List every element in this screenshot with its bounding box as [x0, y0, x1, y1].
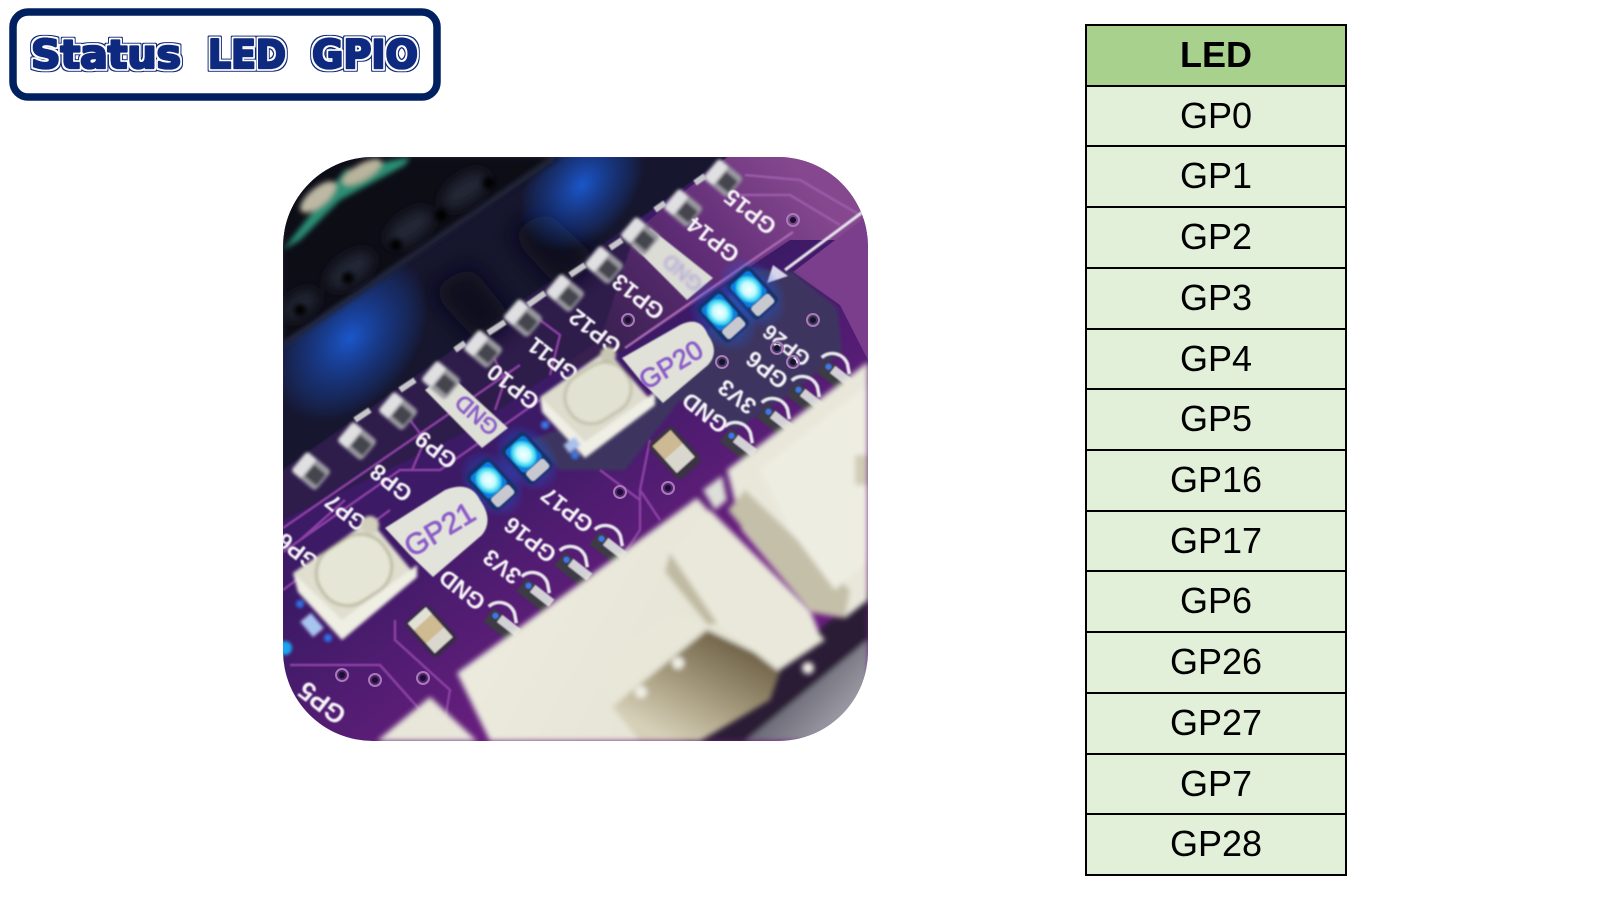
row GP16: GP16 [1170, 459, 1262, 500]
pin labels lower row: 3V3 [713, 374, 761, 420]
pin labels lower row: GP17 [536, 482, 598, 538]
row GP0: GP0 [1180, 95, 1252, 136]
pin labels upper row: GP11 [522, 332, 584, 388]
blue reflection top [522, 157, 642, 248]
capacitor right [648, 426, 701, 480]
table: LED GPIO list [1085, 24, 1347, 876]
pin labels upper row: GP9 [410, 426, 462, 474]
row GP1: GP1 [1180, 155, 1252, 196]
band shadow streaks [430, 210, 600, 345]
connector lower main [457, 498, 825, 741]
GND label left: GND [450, 390, 504, 440]
LED: GP17 [496, 426, 558, 490]
socket ridges [284, 169, 488, 322]
row GP5 [1087, 390, 1345, 451]
row GP16 [1087, 451, 1345, 512]
pin labels upper row: GP7 [320, 489, 372, 537]
silkscreen dashes between pads [355, 176, 705, 420]
silkscreen bar: GND left [425, 372, 508, 448]
row GP6 [1087, 572, 1345, 633]
GP21 text: GP21 [399, 496, 481, 564]
header socket band [283, 157, 727, 470]
pin labels upper row: GP6 [272, 528, 324, 576]
title text: LED [208, 33, 286, 78]
header pads row [290, 158, 744, 491]
GP20 text: GP20 [634, 334, 708, 396]
connector pins [479, 347, 861, 643]
PCB navy zone around LEDs [530, 268, 842, 470]
title text: Status [31, 33, 181, 78]
board edge and rim [680, 590, 868, 741]
pin labels upper row: GP10 [482, 359, 544, 415]
row GP17 [1087, 512, 1345, 572]
silkscreen bar: GND right [632, 228, 713, 300]
green board at top corner [283, 154, 410, 250]
pin labels lower row: GP6 [741, 346, 793, 394]
row GP17: GP17 [1170, 520, 1262, 561]
connector latch [670, 510, 822, 670]
title banner [9, 8, 441, 101]
row GP5: GP5 [1180, 398, 1252, 439]
pin labels upper row: GP15 [719, 184, 781, 240]
LED: GP26 [720, 260, 784, 326]
row GP3 [1087, 269, 1345, 330]
row GP28: GP28 [1170, 823, 1262, 864]
connector bottom left [377, 697, 477, 741]
row GP26: GP26 [1170, 641, 1262, 682]
pin labels upper row: GP5 [292, 675, 352, 731]
row GP4: GP4 [1180, 338, 1252, 379]
pin labels upper row: GP14 [682, 212, 744, 268]
connector upper right [703, 362, 868, 618]
row GP0 [1087, 87, 1345, 147]
blue reflection left [283, 267, 425, 418]
row GP6: GP6 [1180, 580, 1252, 621]
row GP27: GP27 [1170, 702, 1262, 743]
table header: LED [1180, 34, 1252, 75]
row GP2: GP2 [1180, 216, 1252, 257]
connector lip [600, 612, 707, 700]
row GP4 [1087, 330, 1345, 390]
PCB base [283, 157, 868, 741]
PCB traces [283, 175, 860, 720]
pin labels upper row: GP8 [365, 458, 417, 507]
row GP26 [1087, 633, 1345, 694]
title frame [13, 12, 437, 97]
white arrow pointing at LED [767, 208, 868, 283]
row GP3: GP3 [1180, 277, 1252, 318]
socket holes [294, 177, 495, 316]
tactile button: GP21 [278, 516, 417, 655]
silkscreen pill: GP21 [385, 487, 488, 577]
row GP1 [1087, 147, 1345, 208]
PCB right triangle zone [793, 215, 868, 360]
socket edge [283, 157, 555, 345]
pin labels upper row: GP13 [607, 269, 669, 325]
pin labels lower row: GP16 [499, 512, 561, 568]
photo: PCB close-up with status LEDs [283, 157, 868, 741]
pin labels lower row: GND [434, 564, 490, 616]
pin labels lower row: 3V3 [478, 544, 526, 590]
PCB upper purple zone [560, 157, 868, 372]
row GP2 [1087, 208, 1345, 269]
row GP7 [1087, 755, 1345, 815]
row GP7: GP7 [1180, 763, 1252, 804]
title text: GPIO [312, 33, 418, 78]
table header [1087, 26, 1345, 87]
vias [336, 214, 819, 686]
black socket body [283, 157, 560, 345]
pin labels lower row: GP26 [759, 319, 815, 371]
GND label right: GND [659, 249, 707, 295]
capacitor left [405, 604, 457, 658]
connector cavity [612, 630, 780, 741]
silkscreen pill: GP20 [622, 322, 714, 403]
pin labels lower row [434, 319, 815, 616]
dark navy band between header and pads [283, 157, 727, 470]
pin labels lower row: GND [677, 387, 733, 439]
LED: GP6 [690, 283, 756, 350]
tactile button: GP20 [540, 347, 655, 459]
PCB dark left band [283, 218, 640, 520]
pin labels upper row: GP12 [564, 304, 626, 360]
LED: GP16 [462, 452, 522, 516]
pin labels upper row [272, 184, 781, 731]
row GP27 [1087, 694, 1345, 754]
